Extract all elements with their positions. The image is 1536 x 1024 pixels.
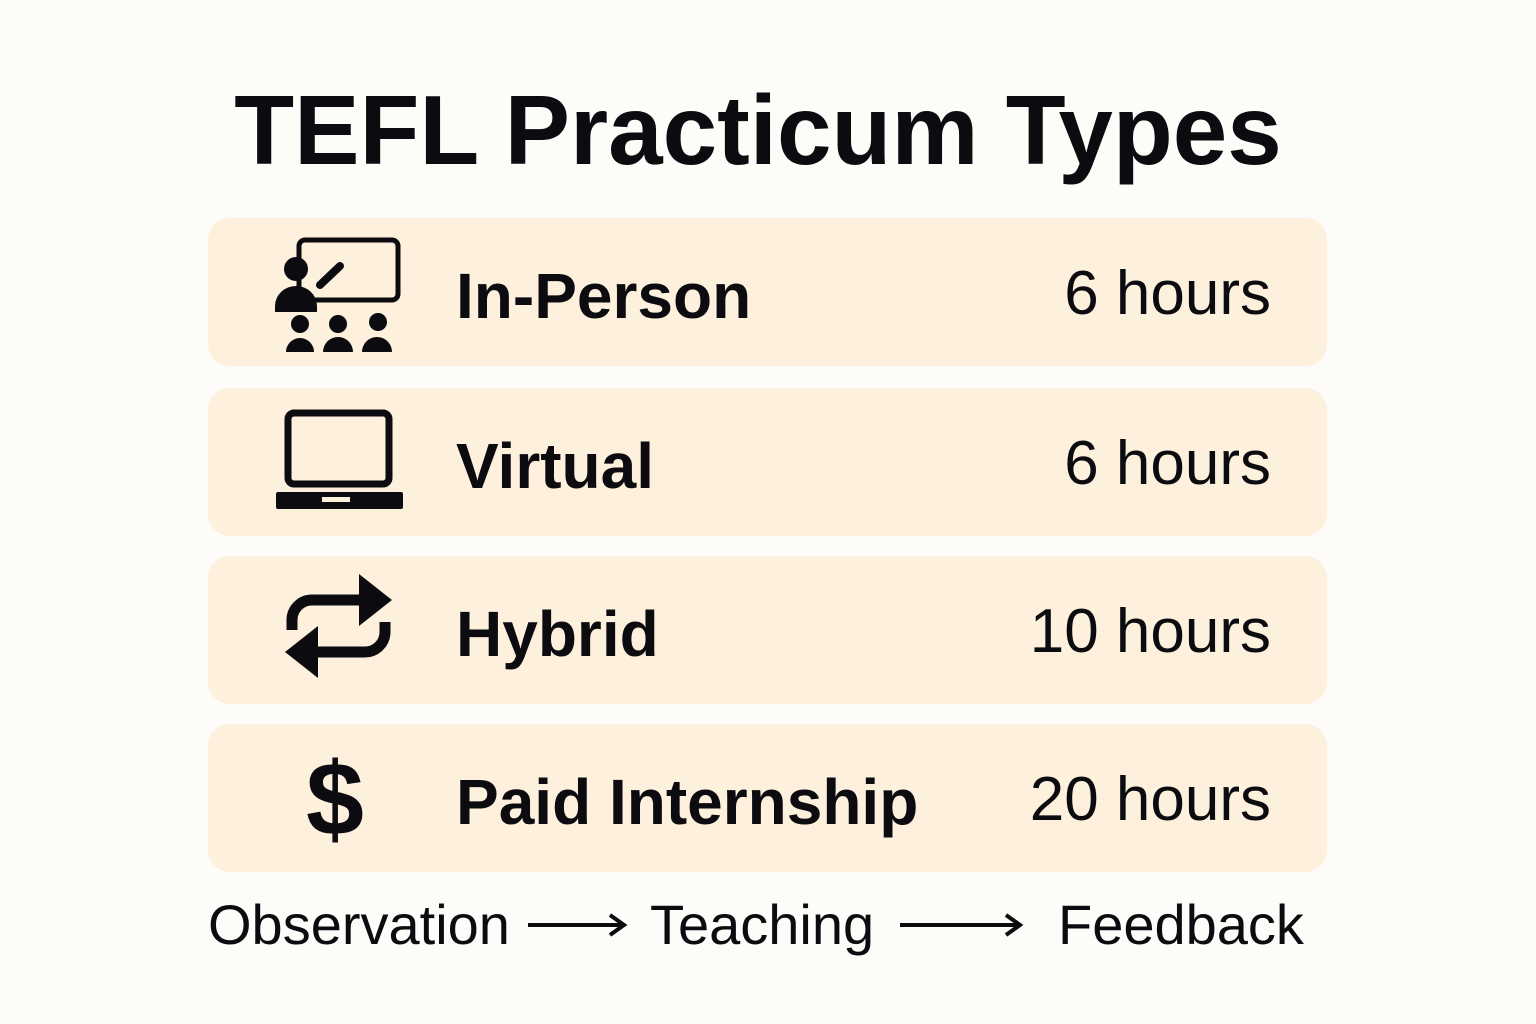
- process flow: Observation: [208, 893, 510, 956]
- row: in-person: [208, 218, 1327, 366]
- title: TEFL Practicum Types: [234, 75, 1282, 185]
- label: Paid Internship: [456, 766, 918, 838]
- icon: classroom: [275, 238, 400, 352]
- label: Hybrid: [456, 598, 659, 670]
- hours: 6 hours: [1064, 429, 1271, 498]
- arrow: [528, 913, 628, 937]
- icon: laptop: [276, 410, 403, 509]
- process flow: Feedback: [1058, 893, 1304, 956]
- icon: dollar: $: [306, 742, 364, 858]
- process flow: [208, 893, 1304, 956]
- row: virtual: [208, 388, 1327, 536]
- hours: 10 hours: [1030, 597, 1271, 666]
- label: In-Person: [456, 260, 751, 332]
- process flow: Teaching: [650, 893, 874, 956]
- hours: 6 hours: [1064, 259, 1271, 328]
- row: hybrid: [208, 556, 1327, 704]
- arrow: [900, 913, 1024, 937]
- icon: swap arrows: [285, 574, 392, 678]
- hours: 20 hours: [1030, 765, 1271, 834]
- row: paid internship: [208, 724, 1327, 872]
- label: Virtual: [456, 430, 654, 502]
